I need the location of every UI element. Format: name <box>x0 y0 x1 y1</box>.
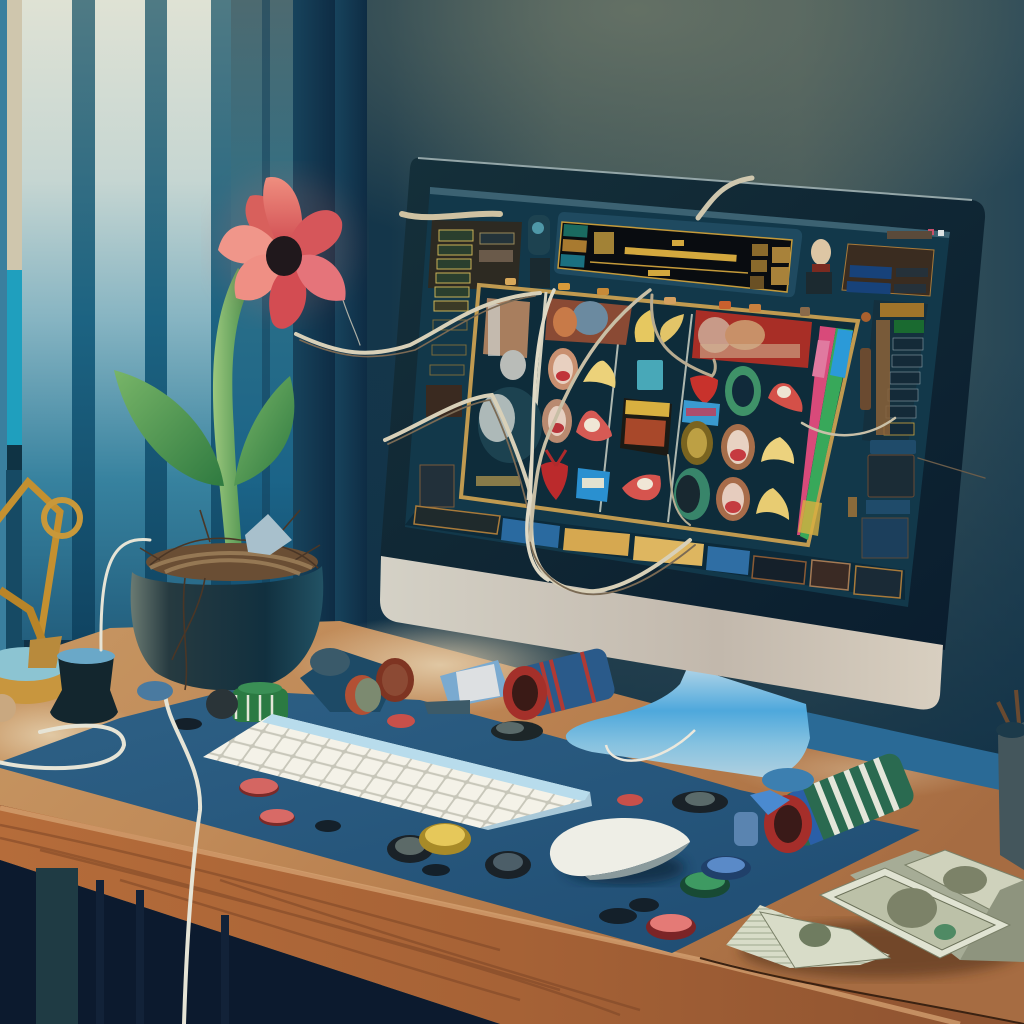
top jackpot display <box>554 212 802 297</box>
yellow chip <box>419 823 471 855</box>
dark cup <box>50 648 118 724</box>
small red chip <box>617 794 643 806</box>
lamp icon on screen <box>806 239 832 294</box>
torn strings across the screen <box>296 178 985 594</box>
banner: middle art <box>545 298 632 345</box>
right side menu <box>848 300 928 558</box>
green chip <box>680 872 730 898</box>
blue card and roll <box>424 646 617 720</box>
symbols row 2 <box>542 398 794 470</box>
keyboard <box>203 714 592 830</box>
black chip near card <box>491 721 543 741</box>
monitor stand <box>566 666 810 778</box>
right roll of chips <box>734 750 917 853</box>
reel dividers <box>528 292 546 500</box>
ghost clock shape <box>478 387 542 463</box>
banner: left art <box>483 298 530 358</box>
monitor chin <box>380 556 943 709</box>
left side panel <box>420 215 550 507</box>
banknotes <box>726 850 1024 978</box>
red chip <box>259 809 295 826</box>
banner: right art <box>692 310 812 368</box>
vertical blinds <box>22 0 367 640</box>
symbols row 3 <box>541 450 789 521</box>
mouse <box>550 818 690 884</box>
right leaf <box>234 376 294 486</box>
bezel <box>380 158 985 650</box>
dry soil fibres <box>146 543 318 581</box>
white cable <box>0 540 200 1024</box>
blue wall skirting <box>806 712 1000 790</box>
red chip <box>646 914 696 940</box>
small chip near pot <box>137 681 173 701</box>
left leaf <box>114 370 224 486</box>
indicator lights <box>505 278 871 322</box>
lamp <box>0 482 80 722</box>
green chips stack <box>206 682 288 722</box>
flower plant <box>114 175 355 552</box>
red and blue stack behind pot <box>300 648 414 715</box>
chip stacks <box>206 646 917 853</box>
red chip <box>239 778 279 797</box>
right upper panel <box>842 231 934 296</box>
loose chips <box>137 681 751 940</box>
reel window <box>461 285 858 545</box>
desk mat <box>0 690 920 953</box>
black chip <box>485 851 531 879</box>
blue chip <box>701 856 751 880</box>
symbols row 1 <box>548 310 802 416</box>
close buttons <box>928 229 934 235</box>
monitor <box>380 158 985 709</box>
screen <box>405 187 950 607</box>
bottom control bar <box>414 506 902 598</box>
pencil cup <box>996 690 1024 870</box>
crumpled paper <box>245 514 292 555</box>
plant pot <box>131 510 323 690</box>
black chip <box>387 835 433 863</box>
flower bloom <box>215 175 355 329</box>
window with water view <box>0 0 26 660</box>
desk <box>0 615 1024 1024</box>
stem <box>213 268 252 552</box>
black chip <box>672 791 728 813</box>
small red chip <box>387 714 415 728</box>
paytable column <box>797 326 853 540</box>
desk top <box>0 621 1024 1024</box>
